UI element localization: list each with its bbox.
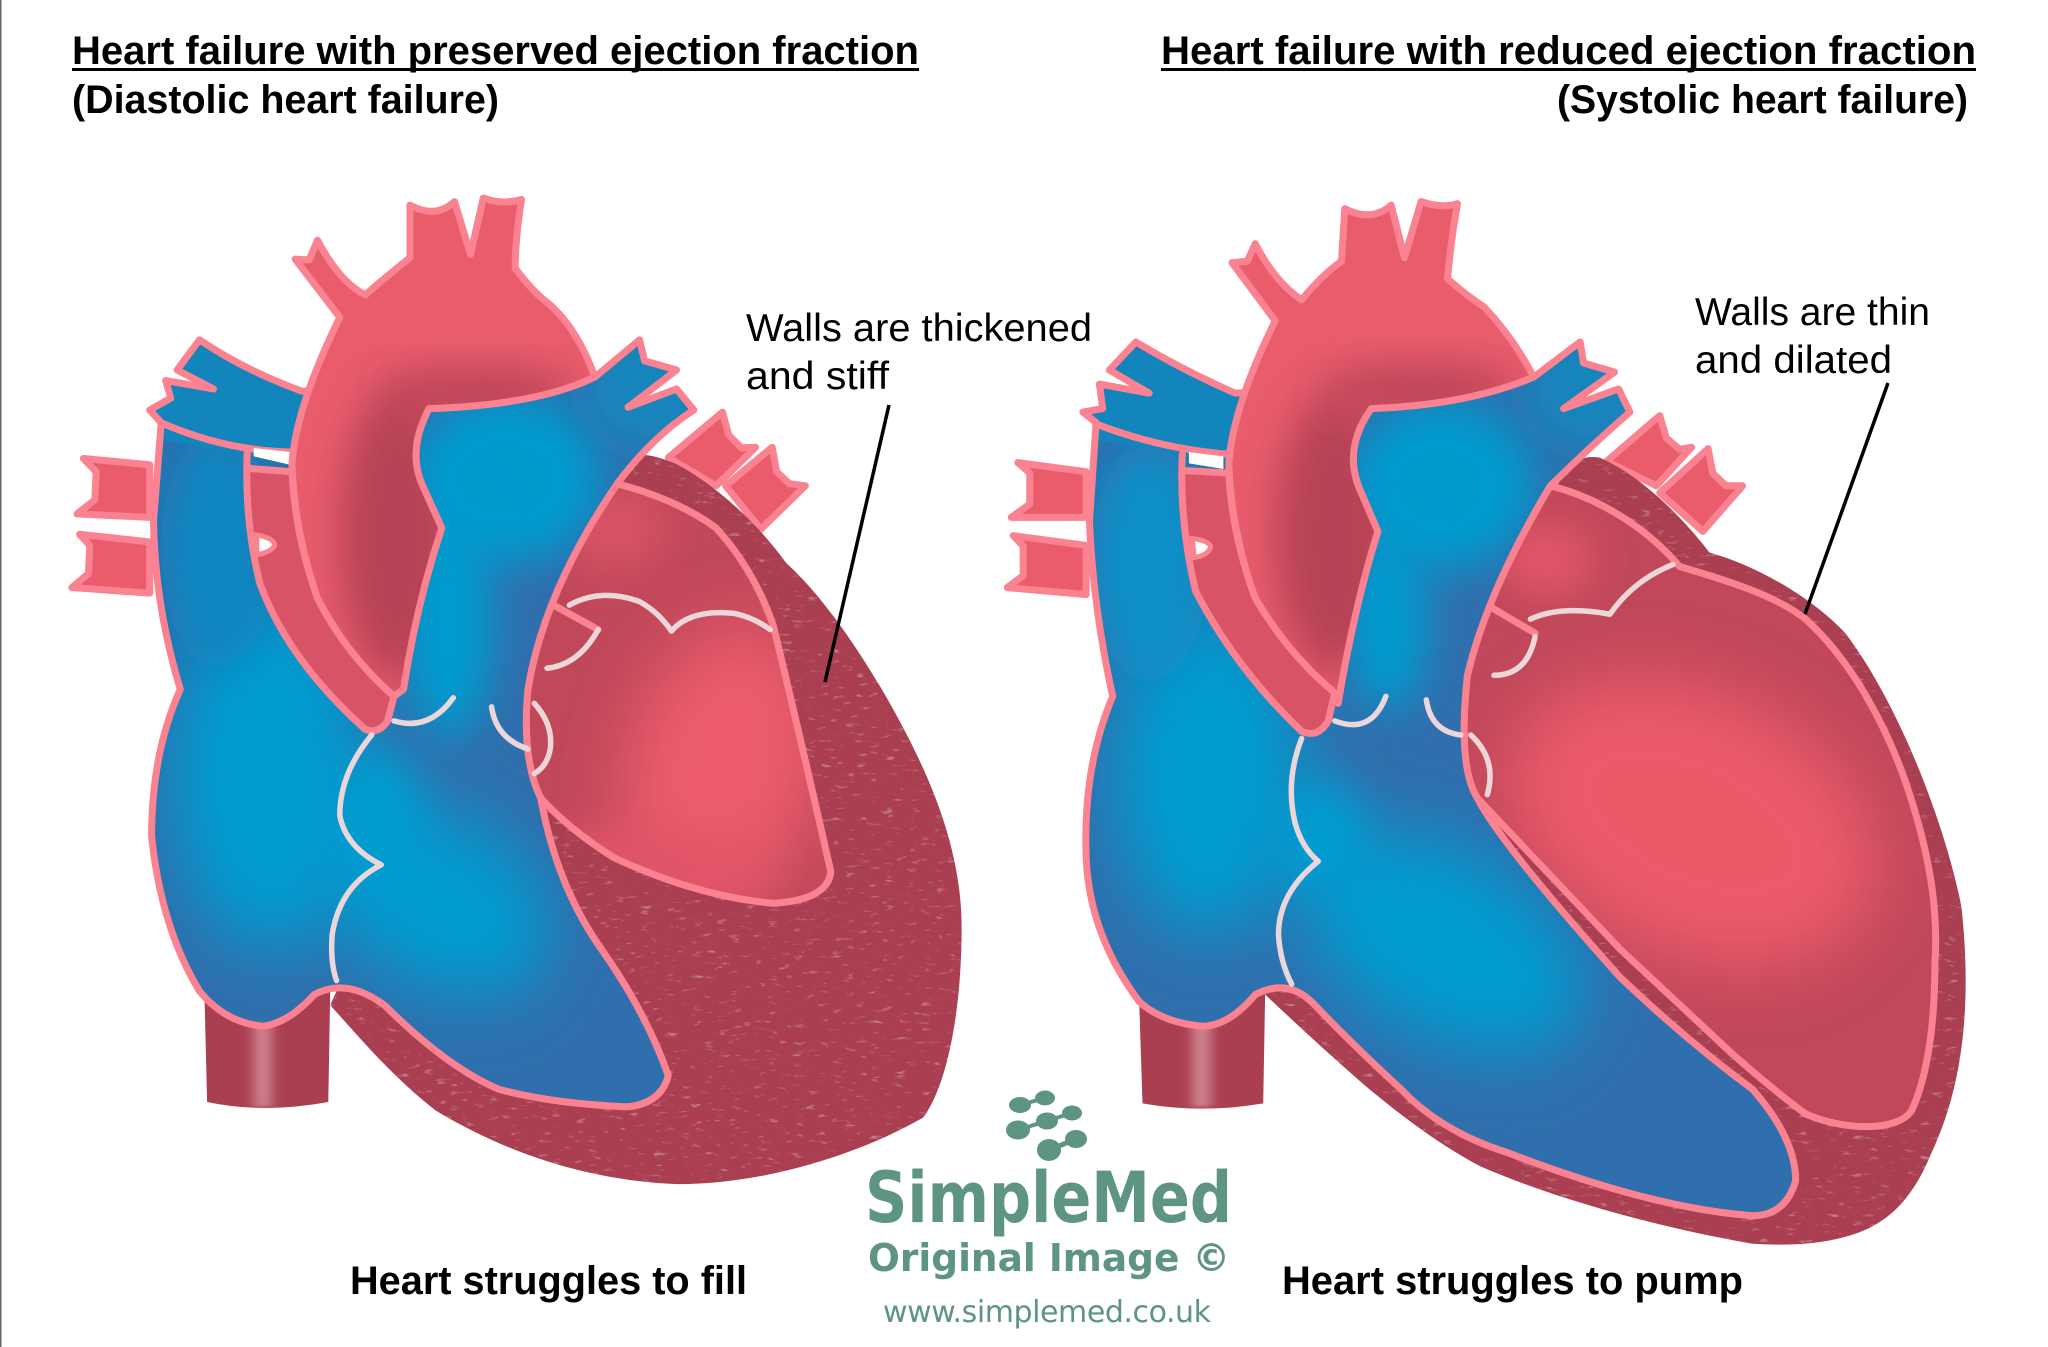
right heart: reduced ejection fraction	[1007, 202, 1978, 1251]
callout: walls thickened: and stiff	[746, 355, 889, 398]
left atrium and ventricle	[530, 482, 834, 907]
callout: walls thickened: Walls are thickened	[746, 307, 1092, 350]
callout: walls thickened	[746, 307, 1092, 682]
logo: SimpleMed: Original Image ©	[868, 1236, 1230, 1280]
callout: walls thin: Walls are thin	[1695, 291, 1930, 334]
inferior vena cava	[205, 991, 330, 1108]
heading: reduced ejection fraction	[1161, 29, 1976, 122]
right atrium and ventricle	[142, 324, 722, 1107]
caption: struggles to pump: Heart struggles to pump	[1282, 1259, 1743, 1303]
valves and septum	[1278, 564, 1673, 984]
logo: SimpleMed	[865, 1090, 1232, 1330]
heading: preserved ejection fraction: Heart failure with preserved ejection fraction	[72, 29, 919, 73]
heading: reduced ejection fraction: (Systolic heart failure)	[1557, 78, 1968, 122]
logo: SimpleMed: www.simplemed.co.uk	[883, 1295, 1212, 1330]
caption: struggles to fill: Heart struggles to fill	[350, 1259, 747, 1303]
vessels: pulmonary veins	[1007, 416, 1743, 595]
aortic root wall strip	[1182, 452, 1335, 733]
valves and septum	[332, 595, 770, 981]
heading: preserved ejection fraction: (Diastolic heart failure)	[72, 78, 499, 122]
logo: SimpleMed: SimpleMed	[865, 1157, 1232, 1239]
thin ventricular wall	[1255, 451, 1978, 1251]
callout: walls thin: and dilated	[1695, 339, 1892, 382]
callout: walls thin	[1695, 291, 1930, 614]
dilated left atrium and ventricle	[1464, 486, 1936, 1127]
inferior vena cava	[1139, 991, 1265, 1109]
aorta	[292, 198, 595, 696]
heading: preserved ejection fraction	[72, 29, 919, 122]
aortic root wall strip	[247, 448, 394, 731]
icon: molecule	[1006, 1090, 1087, 1161]
vessels: pulmonary veins	[72, 412, 805, 593]
thickened ventricular wall	[330, 455, 962, 1184]
right atrium and ventricle	[1076, 324, 1796, 1216]
aorta	[1229, 202, 1534, 703]
heading: reduced ejection fraction: Heart failure with reduced ejection fraction	[1161, 29, 1976, 73]
left heart: preserved ejection fraction	[72, 198, 971, 1195]
